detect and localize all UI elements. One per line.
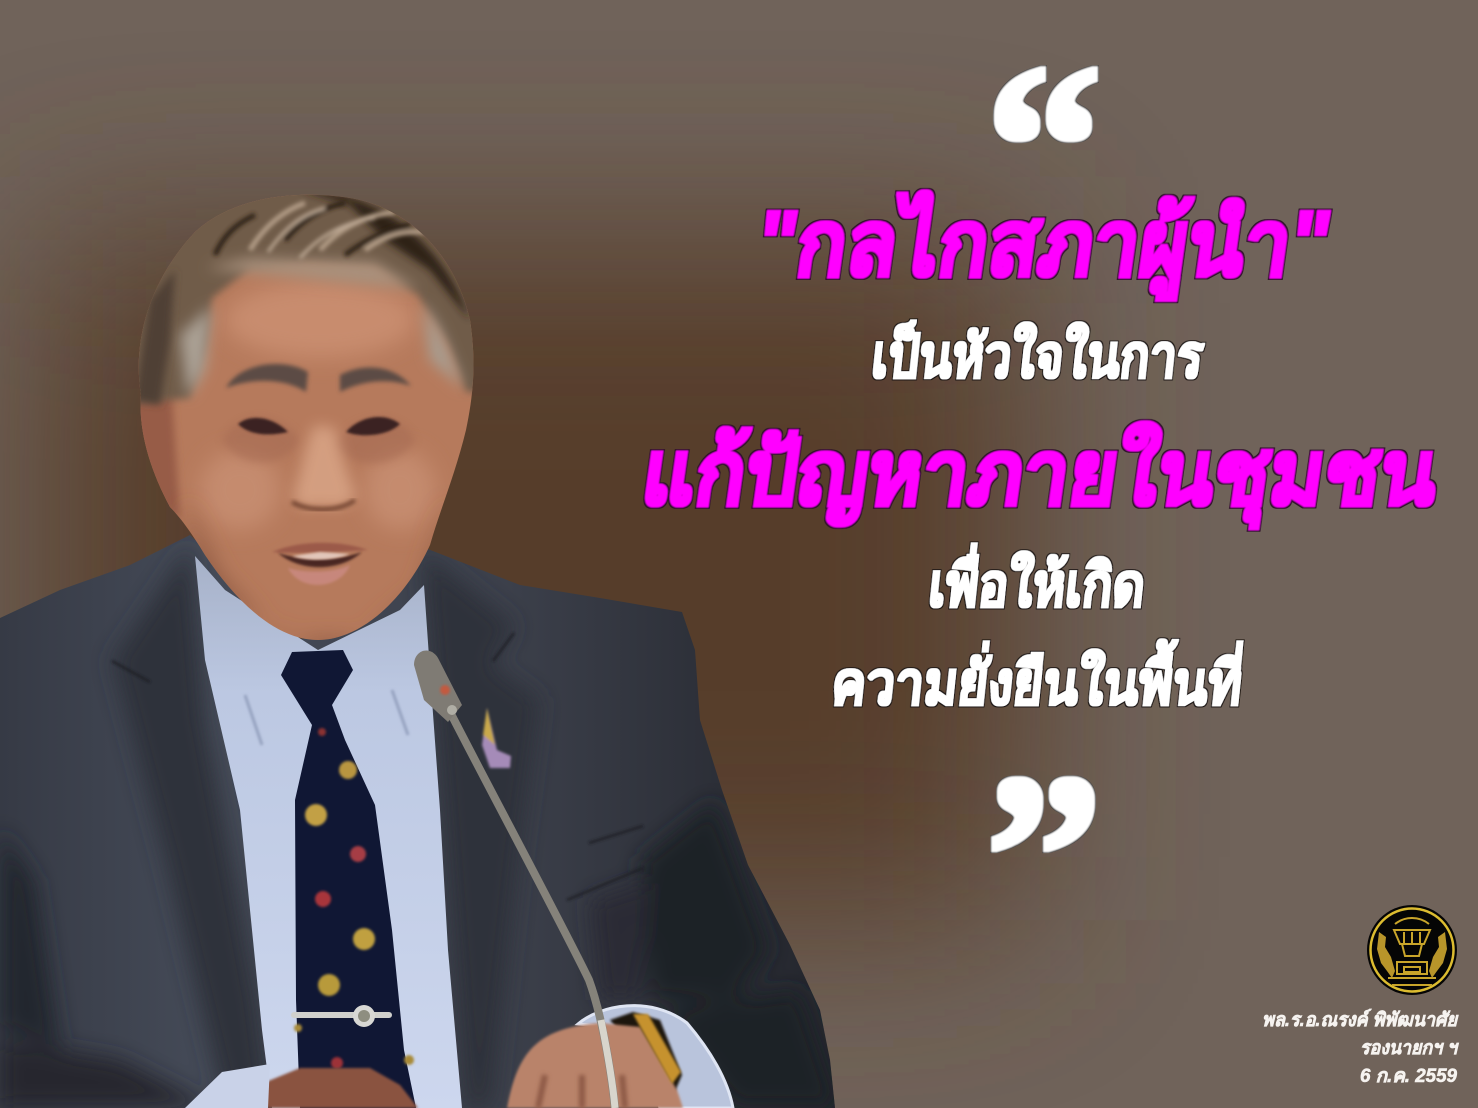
footer: speaker name, position and date: พล.ร.อ.ณรงค์ พิพัฒนาศัย — [1262, 1008, 1459, 1031]
wrist shadow — [610, 1012, 682, 1098]
tie clip — [291, 1005, 392, 1027]
suit jacket — [0, 535, 835, 1108]
text line: เพื่อให้เกิด: เพื่อให้เกิด — [926, 543, 1150, 619]
collar shadow lines — [245, 690, 408, 745]
jacket seam lines — [112, 633, 643, 900]
footer: speaker name, position and date — [1262, 1008, 1459, 1087]
finger shadows — [538, 1075, 625, 1108]
text line: เป็นหัวใจในการ: เป็นหัวใจในการ — [869, 320, 1207, 390]
jaw shade — [186, 520, 432, 640]
cheek highlights — [200, 450, 280, 530]
footer: speaker name, position and date: 6 ก.ค. 2559 — [1360, 1066, 1457, 1087]
hair base — [138, 194, 474, 406]
microphone — [414, 651, 615, 1108]
footer: speaker name, position and date: รองนายกฯ ฯ — [1360, 1038, 1459, 1059]
emblem lions — [1377, 932, 1447, 978]
closing quote mark: ” — [985, 726, 1103, 986]
hair strands — [215, 203, 425, 258]
hair side grey — [180, 305, 212, 398]
head — [138, 194, 474, 640]
opening quote mark: “ — [985, 16, 1103, 276]
facial features — [226, 364, 411, 585]
hair dark crown — [300, 190, 470, 320]
lapel pin — [482, 708, 511, 768]
forehead highlight — [225, 282, 415, 358]
left cuff — [185, 1064, 270, 1108]
text line: ความยั่งยืนในพื้นที่: ความยั่งยืนในพื้นที่ — [829, 639, 1247, 717]
headline: กลไกสภาผู้นำ: "กลไกสภาผู้นำ" — [750, 191, 1338, 301]
nose — [293, 425, 356, 508]
necktie — [281, 650, 416, 1108]
ear shade — [140, 399, 182, 517]
right cuff — [578, 1006, 733, 1108]
icon: government emblem — [1367, 905, 1457, 995]
eyes — [238, 418, 288, 434]
eye sockets — [226, 428, 410, 462]
shirt — [195, 556, 462, 1108]
left hand — [262, 1068, 418, 1108]
mouth — [272, 543, 368, 553]
right hand — [507, 1023, 683, 1108]
eyebrows — [226, 364, 308, 392]
skin base — [138, 194, 474, 640]
wristwatch — [633, 1014, 681, 1084]
photo: speaker at microphone — [0, 0, 840, 1108]
emblem urn — [1388, 918, 1436, 985]
